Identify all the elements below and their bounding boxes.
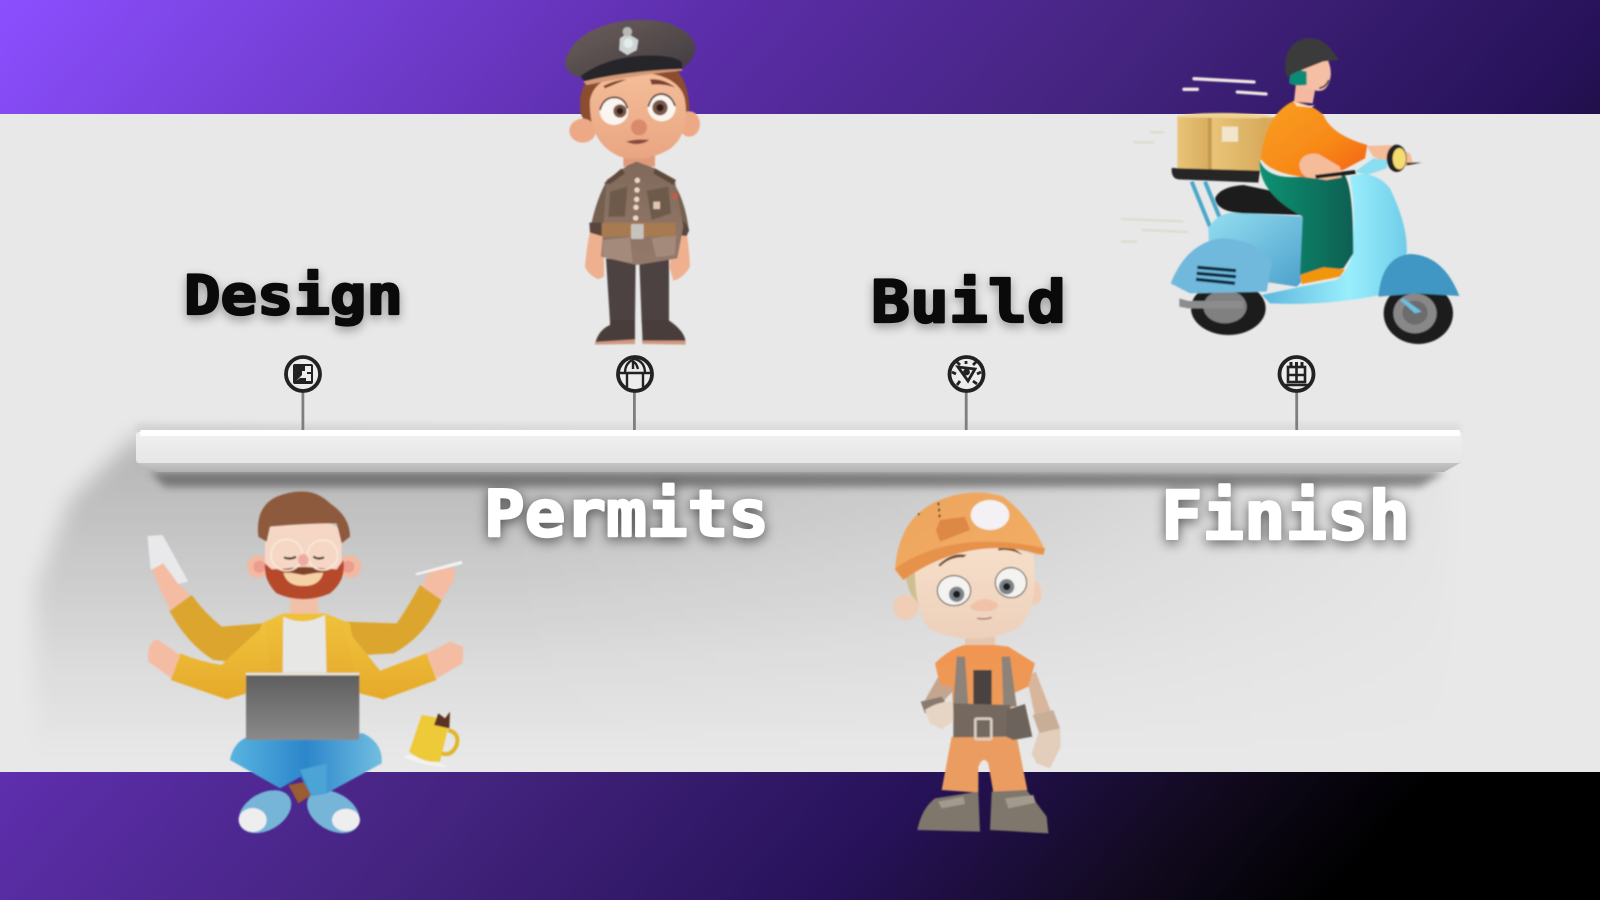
ears, head and beard <box>247 555 270 578</box>
face <box>915 544 1035 639</box>
rack struts <box>1192 182 1219 227</box>
rack and seat <box>1172 168 1260 183</box>
belt <box>602 223 676 237</box>
neck <box>623 150 655 167</box>
illustration: police officer <box>565 20 700 345</box>
glasses and eyes <box>271 539 338 571</box>
heading: Design: Design <box>184 264 403 327</box>
illustration: multi-armed designer with laptop <box>147 491 463 842</box>
icon: build gear <box>952 361 981 385</box>
handlebar and headlight <box>1315 170 1356 179</box>
neck and shirt <box>290 597 318 617</box>
pin: Finish <box>1280 357 1314 430</box>
heading: Build: Build <box>871 268 1066 336</box>
hard hat <box>895 492 1045 580</box>
jeans <box>230 733 382 796</box>
heading: Permits: Permits <box>484 478 769 552</box>
jacket <box>601 162 683 265</box>
boots <box>917 792 980 832</box>
shelf timeline bar <box>136 430 1462 472</box>
trousers <box>942 737 1027 793</box>
back arms <box>169 595 270 662</box>
rider head and helmet <box>1294 83 1316 103</box>
scooter body <box>1208 213 1307 287</box>
boots <box>595 320 685 344</box>
pockets <box>608 187 671 220</box>
arms and hands <box>590 178 623 235</box>
eyes <box>937 576 971 606</box>
neck <box>965 630 995 650</box>
hair and ear <box>903 553 920 607</box>
boxes <box>1258 117 1275 160</box>
buttons <box>633 178 640 221</box>
pin: Build <box>950 357 984 430</box>
illustration: construction worker <box>893 492 1061 833</box>
trousers <box>606 257 669 322</box>
hat <box>565 20 695 78</box>
sneakers <box>231 781 299 842</box>
speed lines <box>1122 79 1266 242</box>
rider torso and arms <box>1261 101 1367 177</box>
illustration: delivery rider on scooter <box>1122 38 1459 344</box>
coffee mug <box>403 755 448 767</box>
rider legs and shoe <box>1259 160 1353 275</box>
pin: Permits <box>618 357 652 430</box>
face <box>590 72 686 159</box>
hair <box>258 491 350 543</box>
icon: design board <box>293 364 313 384</box>
jacket and front arms <box>243 613 363 693</box>
hair and ears <box>580 70 689 133</box>
shirt and straps <box>935 645 1035 710</box>
tablet and pen <box>147 535 188 584</box>
icon: permit dome <box>620 359 650 387</box>
arms <box>925 677 957 703</box>
wheels <box>1191 282 1266 335</box>
icon: calendar <box>1285 362 1308 385</box>
shelf shadow on wall <box>32 422 1458 696</box>
laptop <box>246 673 359 740</box>
eyes <box>600 97 628 125</box>
heading: Finish: Finish <box>1161 477 1410 555</box>
pin: Design <box>286 357 320 430</box>
belt and pouch <box>953 703 1012 737</box>
